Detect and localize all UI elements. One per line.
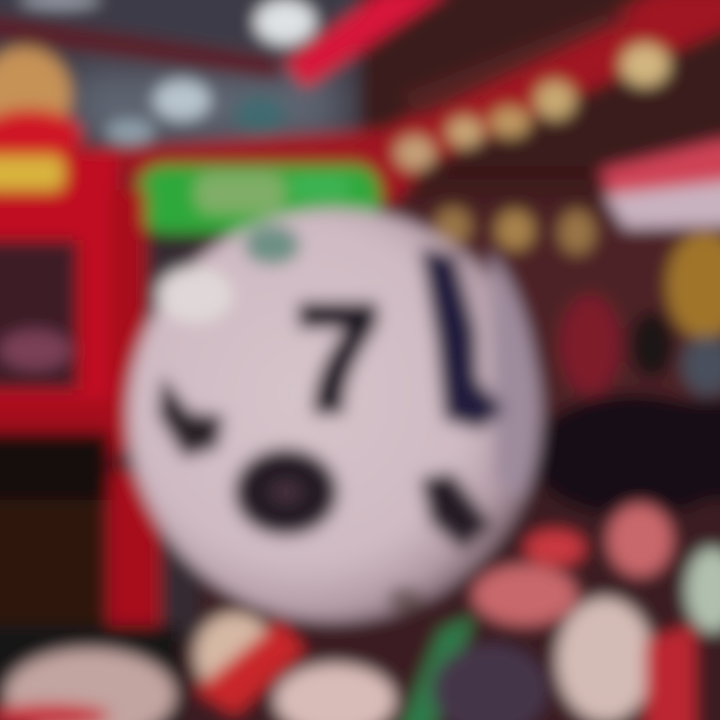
ball highlight [157,267,233,323]
lower edge mark [387,587,423,609]
number seven: 7 [296,274,380,442]
left numeral mark [158,375,224,458]
dark band [0,432,110,500]
crowd silhouette [530,311,720,517]
red beams [0,0,720,205]
red machine [0,47,180,720]
machine window [0,240,78,390]
ceiling lights [20,0,315,144]
right edge shade [490,250,538,500]
number one [420,248,504,430]
machine lower panel [0,500,104,640]
main lottery ball [128,208,542,622]
green sign [138,165,380,233]
yellow band [0,156,64,190]
bottom number [234,448,338,536]
green reflection [244,225,300,265]
machine top dome [0,47,71,143]
right side: striped awning [560,140,720,395]
string of lights [395,44,669,254]
lower right numeral mark [420,472,492,550]
foreground balls [0,504,720,720]
